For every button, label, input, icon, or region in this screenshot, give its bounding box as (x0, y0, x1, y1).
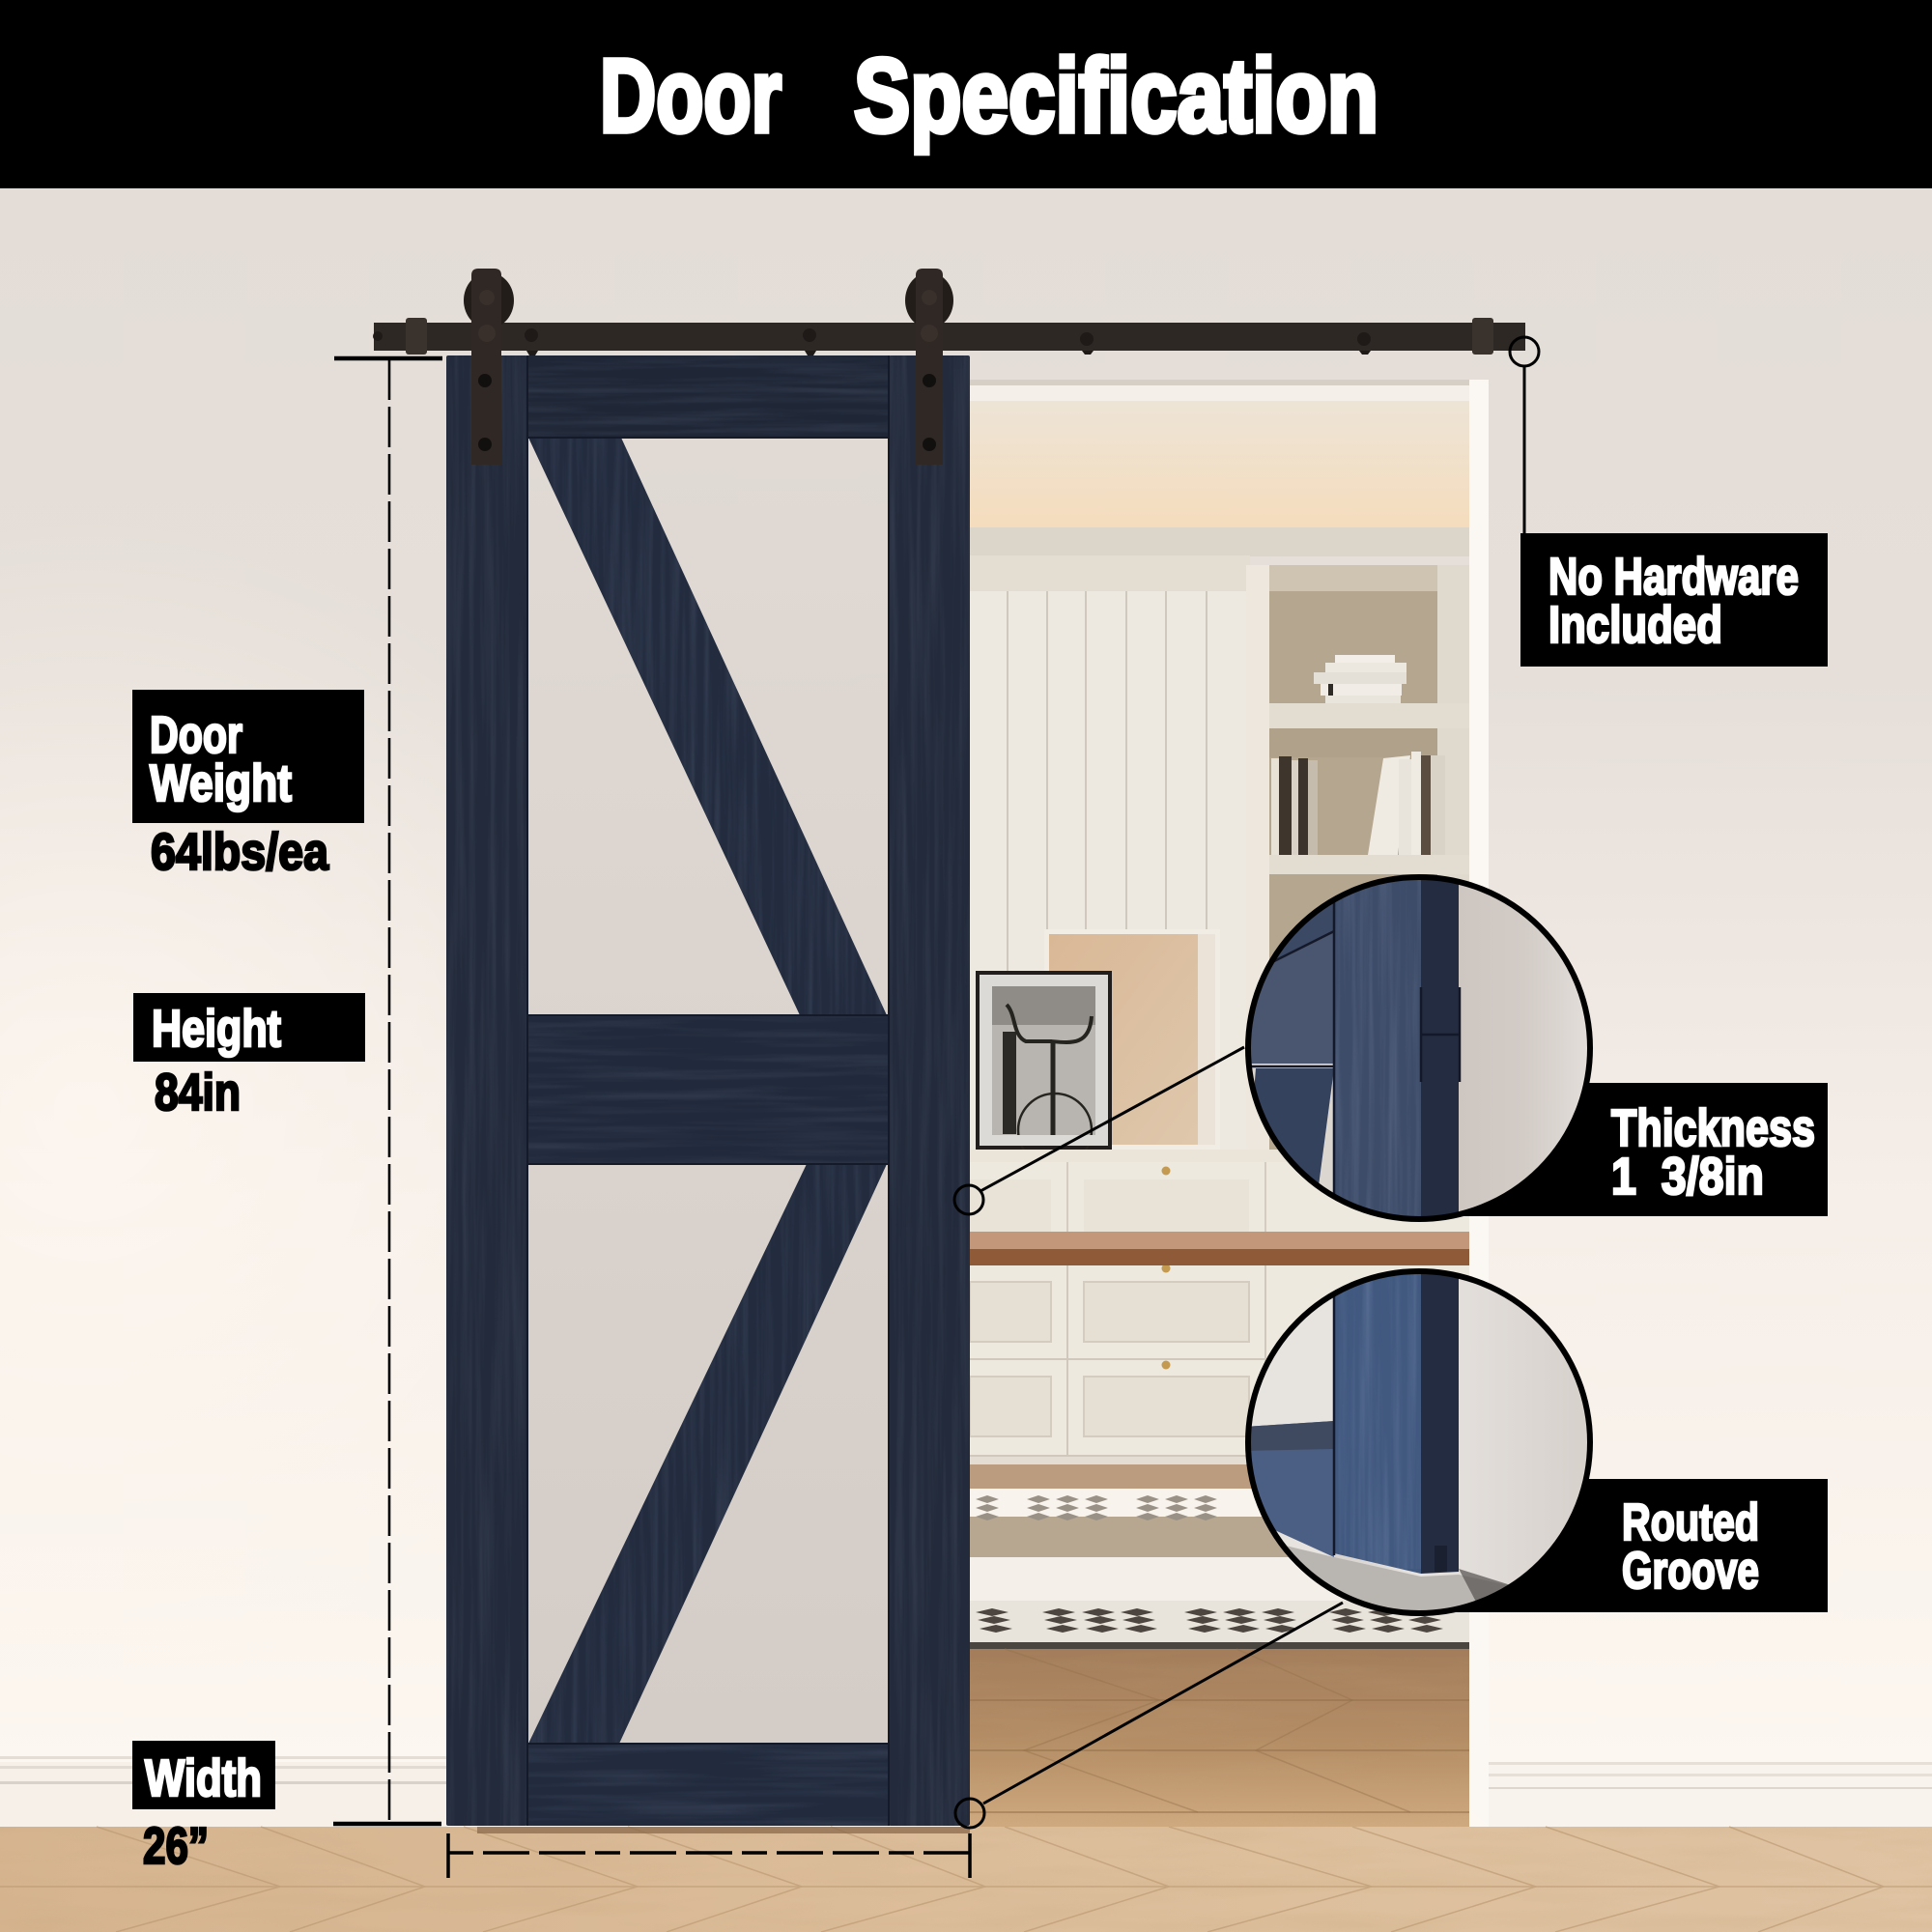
rail (374, 323, 1525, 351)
title (600, 37, 1378, 154)
pointer: thickness (954, 1047, 1244, 1214)
rug (970, 1489, 1469, 1649)
crown moulding (970, 527, 1469, 556)
label: routed groove (1430, 1479, 1828, 1612)
label: door weight: Weight (150, 754, 292, 812)
baseboard (0, 1756, 1932, 1827)
label: routed groove: Routed (1622, 1493, 1759, 1551)
wooden counter (970, 1232, 1469, 1265)
magnifier: routed groove (1245, 1269, 1593, 1623)
left rail stop (406, 318, 427, 355)
right rail stop (1472, 318, 1493, 355)
height dimension line (333, 358, 442, 1826)
title: Specification (854, 37, 1378, 154)
vertical wood grain (446, 355, 970, 1826)
title: Door (600, 37, 781, 154)
door opening with room scene (970, 380, 1469, 1827)
label: thickness: 1 3/8in (1611, 1148, 1764, 1206)
cabinet plinth (970, 1457, 1246, 1464)
beige art print (1044, 929, 1220, 1150)
callout label: no hardware: No Hardware (1548, 548, 1799, 606)
label: width: Width (145, 1749, 262, 1807)
panelled wall (970, 591, 1246, 971)
value: door weight: 64lbs/ea (151, 823, 329, 881)
header bar (0, 0, 1932, 188)
floor (0, 1827, 1932, 1932)
shadow under rail (970, 380, 1469, 385)
callout label: no hardware (1520, 533, 1828, 667)
lower cabinets (970, 1150, 1469, 1457)
label: thickness (1430, 1083, 1828, 1216)
magnifier: door edge thickness (1245, 875, 1593, 1223)
door jamb (1469, 380, 1489, 1827)
pointer: routed groove (955, 1603, 1343, 1828)
label: height: Height (152, 1000, 281, 1058)
label: thickness: Thickness (1611, 1099, 1815, 1157)
callout label: no hardware: Included (1548, 596, 1722, 654)
right roller hanger (905, 269, 953, 465)
door frame and braces (446, 355, 970, 1826)
black framed bicycle photo (976, 971, 1112, 1167)
label: door weight: Door (150, 706, 242, 764)
width dimension line (448, 1833, 970, 1878)
stacked books (1314, 655, 1406, 703)
barn door (446, 355, 970, 1826)
left roller hanger (464, 269, 514, 465)
opening top trim (970, 385, 1469, 401)
door shadow on floor (477, 1827, 970, 1833)
room floor (970, 1464, 1252, 1489)
label: height (133, 993, 365, 1062)
label: door weight (132, 690, 364, 823)
room ceiling (970, 401, 1469, 531)
rail bolts (373, 328, 1371, 355)
bookshelf (1246, 565, 1469, 1154)
label: routed groove: Groove (1622, 1542, 1759, 1600)
herringbone floor in room (970, 1649, 1469, 1827)
sliding track hardware (373, 269, 1525, 465)
joint lines (527, 355, 889, 1826)
value: width: 26” (143, 1817, 209, 1875)
upright books (1271, 752, 1445, 855)
callout: hardware pointer (1510, 337, 1539, 533)
horizontal wood grain (528, 368, 888, 1826)
door window panels (527, 438, 889, 1744)
value: height: 84in (155, 1064, 241, 1122)
